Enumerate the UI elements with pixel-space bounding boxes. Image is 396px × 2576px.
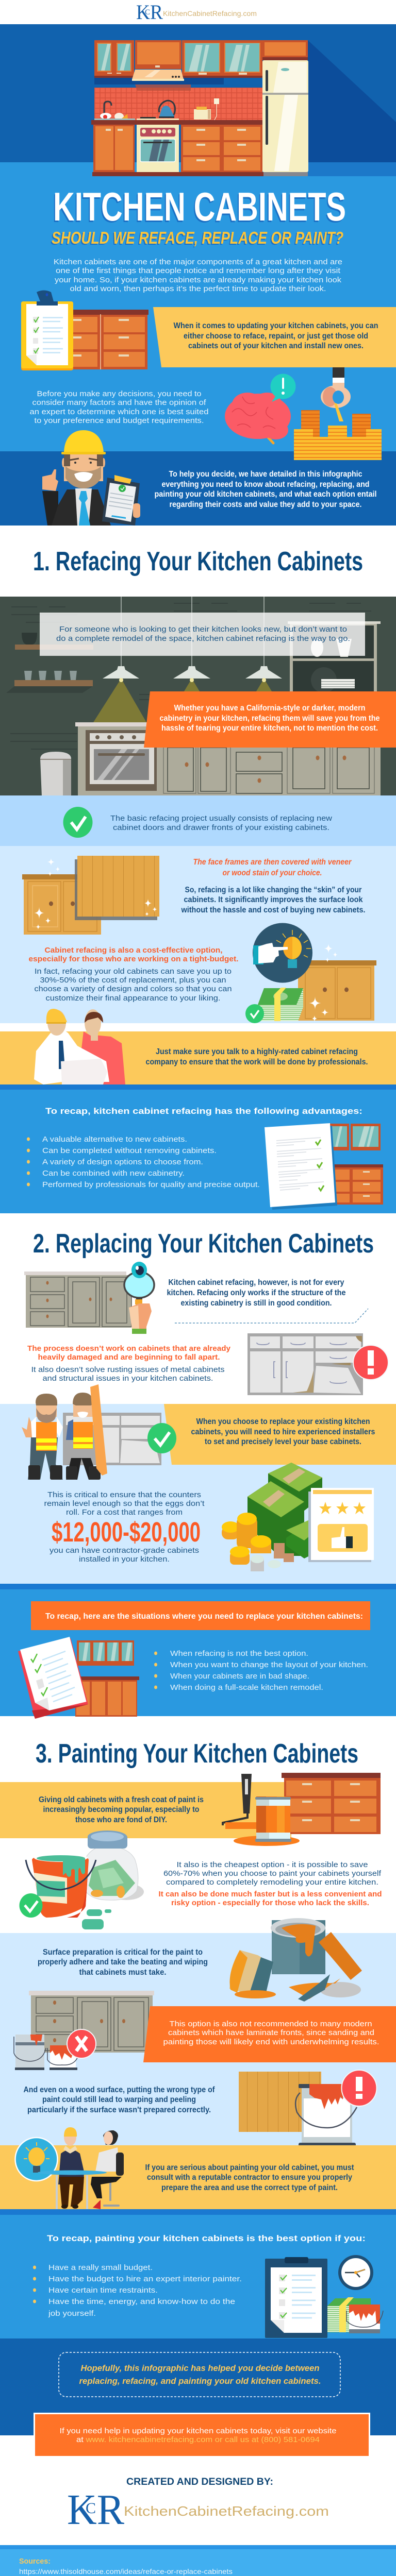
illustration: contractor and client xyxy=(34,1009,125,1084)
text: cheapest option: 60%-70% when you choose to paint your cabinets yourself xyxy=(163,1869,382,1878)
panel: sources: https://www.thisoldhouse.com/ideas/reface-or-replace-cabinets xyxy=(19,2567,233,2575)
callout: yellow update options: either choose to reface, repaint, or just get those old xyxy=(184,332,368,341)
panel: recap refacing advantages: A valuable alternative to new cabinets. xyxy=(42,1135,187,1144)
text: contractor-grade: installed in your kitchen. xyxy=(79,1555,170,1564)
panel: sources xyxy=(0,2545,396,2576)
illustration: paint can, roller and drawers xyxy=(223,1773,381,1846)
illustration: wood panel with paint can alert xyxy=(239,2070,376,2147)
text: before you decide: to your preference and budget requirements. xyxy=(34,416,204,425)
panel: closing dark blue: replacing, refacing, and painting your old kitchen cabinets. xyxy=(79,2376,321,2386)
panel: recap painting: Have a really small budget. xyxy=(48,2263,153,2272)
illustration: brain with alert xyxy=(225,374,296,443)
callout: yellow update options xyxy=(153,307,396,367)
illustration: red clipboard and cabinets xyxy=(18,1637,139,1719)
text: refacing is not for every kitchen xyxy=(167,1278,368,1323)
callout: contact: at www. kitchencabinetrefacing.com or call us at (800) 581-0694 xyxy=(76,2435,320,2444)
panel: yellow talk to a company xyxy=(0,1031,396,1084)
footer logo: KitchenCabinetRefacing.com xyxy=(124,2503,329,2519)
illustration: kitchen scene xyxy=(0,597,396,796)
illustration: kitchen xyxy=(91,40,308,176)
text: how this infographic helps: regarding their costs and value they add to your space. xyxy=(169,500,362,509)
panel: recap replacing: When your cabinets are in bad shape. xyxy=(170,1672,309,1681)
callout: contact xyxy=(34,2413,370,2456)
panel: recap refacing advantages: Performed by professionals for quality and precise output. xyxy=(42,1180,260,1189)
illustration: gray cabinet with paint buckets xyxy=(14,1991,154,2070)
panel: yellow talk to a company: Just make sure you talk to a highly-rated cabinet refacing xyxy=(156,1047,358,1056)
illustration: tipped paint can, brush and roller xyxy=(229,1918,362,2002)
header logo: KitchenCabinetRefacing.com xyxy=(163,9,257,18)
callout: yellow installers: to set and precisely level your base cabinets. xyxy=(205,1437,361,1446)
text: before you decide xyxy=(30,389,209,425)
panel: recap replacing: When you want to change the layout of your kitchen. xyxy=(170,1660,368,1669)
header logo: C xyxy=(145,8,150,16)
cost range figure: $12,000-$20,000 xyxy=(52,1517,201,1548)
band: blue decide panel xyxy=(0,451,396,526)
panel: basic refacing project: cabinet doors and drawer fronts of your existing cabinets. xyxy=(113,823,329,832)
illustration: wood cabinet with veneer xyxy=(22,856,159,935)
text: cheapest option: risky option - especially for those who lack the skills. xyxy=(171,1899,369,1907)
text: before you decide: an expert to determine which one is best suited xyxy=(30,408,209,416)
illustration: gray cabinet with magnifier xyxy=(24,1262,154,1334)
text: face frames xyxy=(181,858,365,914)
callout: yellow installers: cabinets, you will need to hire experienced installers xyxy=(191,1428,375,1436)
text: refacing is not for every kitchen: existing cabinetry is still in good condition. xyxy=(180,1299,332,1308)
panel: recap painting: Have the budget to hire an expert interior painter. xyxy=(48,2275,242,2283)
text: face frames: without the hassle and cost of buying new cabinets. xyxy=(181,906,365,914)
illustration: cabinet, idea and savings xyxy=(245,923,376,1023)
panel: yellow fresh coat: Giving old cabinets with a fresh coat of paint is xyxy=(39,1795,204,1804)
text: how this infographic helps: painting your old kitchen cabinets, and what each option entail xyxy=(155,490,376,499)
intro text: old and worn, then perhaps it’s the perfect time to update their look. xyxy=(70,284,326,293)
panel: yellow talk to a company: company to ensure that the work will be done by professionals. xyxy=(145,1058,368,1066)
panel: yellow reputable contractor: prepare the area and use the correct type of paint. xyxy=(161,2183,338,2192)
illustration: clipboard, clock, money and paint xyxy=(265,2255,383,2338)
panel: yellow reputable contractor xyxy=(0,2145,396,2209)
text: cost-effective option: choose a variety of design and colors so that you can xyxy=(34,985,232,993)
text: damaged cabinets warning: and structural issues in your kitchen cabinets. xyxy=(42,1374,213,1383)
text: contractor-grade xyxy=(50,1546,199,1564)
header logo: KR xyxy=(136,1,163,24)
text: damaged cabinets warning xyxy=(27,1344,231,1383)
intro text: Kitchen cabinets are one of the major components of a great kitchen and are xyxy=(54,258,342,266)
text: cost-effective option: In fact, refacing your old cabinets can save you up to xyxy=(35,967,232,976)
text: critical levels: remain level enough so that the eggs don’t xyxy=(44,1499,205,1508)
illustration: checklist paper and cabinets xyxy=(265,1123,383,1210)
footer logo: KR xyxy=(67,2486,124,2534)
text: before you decide: Before you make any decisions, you need to xyxy=(37,389,201,398)
text: cost-effective option: especially for those who are working on a tight-budget. xyxy=(29,955,238,963)
panel: recap refacing advantages: Can be combined with new cabinetry. xyxy=(42,1169,185,1178)
panel: sources: Sources: xyxy=(19,2557,51,2566)
text: face frames: or wood stain of your choice. xyxy=(223,869,322,877)
text: cost-effective option: 30%-50% of the cost of replacement, plus you can xyxy=(40,976,226,985)
panel: closing dark blue xyxy=(0,2338,396,2435)
illustration: clipboard checklist xyxy=(21,291,73,370)
text: wrong paint warning xyxy=(24,2086,215,2114)
text: how this infographic helps: To help you decide, we have detailed in this infographic xyxy=(169,470,362,479)
panel: yellow fresh coat: those who are fond of DIY. xyxy=(75,1816,167,1824)
callout: yellow installers xyxy=(164,1404,396,1465)
panel: basic refacing project: The basic refacing project usually consists of replacing new xyxy=(110,814,332,823)
panel: recap painting: job yourself. xyxy=(48,2309,96,2318)
text: cheapest option: compared to completely remodeling your entire kitchen. xyxy=(166,1878,378,1887)
panel: closing dark blue: Hopefully, this infographic has helped you decide between xyxy=(80,2363,320,2373)
text: cost-effective option: customize their final appearance to your liking. xyxy=(45,994,221,1003)
text: cost-effective option: Cabinet refacing is also a cost-effective option, xyxy=(44,946,223,955)
text: surface preparation xyxy=(38,1948,208,1977)
illustration: contractor with clipboard xyxy=(42,430,140,526)
text: critical levels xyxy=(44,1490,205,1517)
illustration: savings jar and paint bucket xyxy=(20,1831,144,1929)
callout: orange California-style: Whether you have a California-style or darker, modern xyxy=(174,704,365,713)
panel: yellow reputable contractor: If you are serious about painting your old cabinet, you must xyxy=(145,2163,354,2172)
panel: refacing intro: For someone who is looking to get their kitchen looks new, but don’t want to xyxy=(59,625,347,634)
text: contractor-grade: you can have contractor-grade cabinets xyxy=(50,1546,199,1555)
callout: yellow update options: cabinets out of your kitchen and install new ones. xyxy=(188,342,364,350)
panel: refacing intro xyxy=(40,613,365,656)
intro text xyxy=(54,258,342,293)
illustration: installers and damaged cabinet xyxy=(22,1384,176,1480)
text: before you decide: consider many factors and have the opinion of xyxy=(32,398,206,407)
panel: pale blue refacing details xyxy=(0,846,396,1023)
panel: recap refacing advantages xyxy=(0,1084,396,1213)
hero background xyxy=(0,24,396,451)
text: cheapest option xyxy=(159,1860,382,1907)
credits heading: CREATED AND DESIGNED BY: xyxy=(126,2477,273,2487)
footer logo: C xyxy=(86,2500,96,2517)
illustration: drawers cabinet xyxy=(73,310,148,369)
callout: yellow update options: When it comes to updating your kitchen cabinets, you can xyxy=(173,321,378,330)
text: cost-effective option xyxy=(29,946,238,1003)
text: surface preparation: properly adhere and take the beating and wiping xyxy=(38,1958,208,1967)
text: damaged cabinets warning: It also doesn’t solve rusting issues of metal cabinets xyxy=(31,1365,224,1374)
illustration: money, coins and rating card xyxy=(222,1463,374,1571)
text: refacing is not for every kitchen: kitchen. Refacing only works if the structure of the xyxy=(167,1289,346,1297)
callout: orange laminate warning: painting those will likely end with underwhelming results. xyxy=(163,2038,380,2046)
panel: yellow fresh coat xyxy=(0,1782,291,1838)
panel: recap replacing: When doing a full-scale kitchen remodel. xyxy=(170,1683,323,1692)
callout: orange California-style xyxy=(144,691,396,748)
text: face frames: cabinets. It significantly improves the surface look xyxy=(184,895,363,904)
callout: orange laminate warning: This option is also not recommended to many modern xyxy=(169,2020,372,2028)
text: cheapest option: It also is the cheapest option - it is possible to save xyxy=(176,1860,368,1869)
callout: orange laminate warning xyxy=(143,2006,396,2062)
text: critical levels: This is critical to ensure that the counters xyxy=(47,1490,201,1499)
callout: yellow installers: When you choose to replace your existing kitchen xyxy=(196,1417,370,1426)
callout: contact: If you need help in updating your kitchen cabinets today, visit our website xyxy=(60,2427,336,2435)
panel: recap replacing: To recap, here are the situations where you need to replace your kitchen cabinets: xyxy=(45,1612,363,1621)
panel: recap painting: Have certain time restraints. xyxy=(48,2286,158,2295)
illustration: damaged cabinet with alert xyxy=(248,1333,388,1395)
callout: orange laminate warning: cabinets which have laminate fronts, since sanding and xyxy=(168,2028,374,2037)
panel: pale blue replacing xyxy=(0,1404,396,1584)
footer logo xyxy=(67,2486,329,2534)
panel: recap replacing: When refacing is not the best option. xyxy=(170,1649,308,1658)
illustration: hand and coin stacks xyxy=(294,367,382,460)
panel: recap painting: To recap, painting your kitchen cabinets is the best option if you: xyxy=(47,2233,366,2243)
text: wrong paint warning: paint could still lead to warping and peeling xyxy=(42,2095,196,2104)
text: how this infographic helps: everything you need to know about refacing, replacing, and xyxy=(162,480,369,489)
callout: orange California-style: hassle of tearing your entire kitchen, not to mention the cost. xyxy=(161,724,378,733)
intro text: your home. So, if your kitchen cabinets are already making your kitchen look xyxy=(55,276,342,284)
text: wrong paint warning: And even on a wood surface, putting the wrong type of xyxy=(24,2086,215,2094)
text: wrong paint warning: particularly if the surface wasn't prepared correctly. xyxy=(27,2106,211,2114)
panel: recap refacing advantages: To recap, kitchen cabinet refacing has the following advantages: xyxy=(45,1106,362,1116)
text: cheapest option: It can also be done much faster but is a less convenient and xyxy=(159,1890,382,1899)
text: surface preparation: that cabinets must take. xyxy=(79,1968,166,1977)
panel: recap painting: Have the time, energy, and know-how to do the xyxy=(48,2297,235,2306)
text: face frames: So, refacing is a lot like changing the “skin” of your xyxy=(185,886,362,894)
panel: recap replacing xyxy=(0,1584,396,1716)
text: surface preparation: Surface preparation is critical for the paint to xyxy=(43,1948,203,1957)
panel: recap refacing advantages: Can be completed without removing cabinets. xyxy=(42,1146,217,1155)
panel: pale blue surface preparation xyxy=(0,1933,396,2145)
panel: recap refacing advantages: A variety of design options to choose from. xyxy=(42,1158,203,1166)
text: critical levels: roll. For a cost that ranges from xyxy=(66,1508,183,1517)
text: refacing is not for every kitchen: Kitchen cabinet refacing, however, is not for every xyxy=(168,1278,344,1287)
illustration: consultation at table xyxy=(15,2127,124,2209)
header logo xyxy=(136,1,257,24)
panel: yellow fresh coat: increasingly becoming popular, especially to xyxy=(43,1805,200,1814)
panel: refacing intro: do a complete remodel of the space, kitchen cabinet refacing is the way to go. xyxy=(56,634,350,643)
panel: yellow reputable contractor: consult with a reputable contractor to ensure you properly xyxy=(147,2173,352,2182)
text: how this infographic helps xyxy=(155,470,376,509)
text: face frames: The face frames are then covered with veneer xyxy=(193,858,352,867)
text: damaged cabinets warning: The process doesn’t work on cabinets that are already xyxy=(27,1344,231,1353)
text: damaged cabinets warning: heavily damaged and are beginning to fall apart. xyxy=(38,1353,220,1362)
intro text: one of the first things that people notice and remember long after they visit xyxy=(56,266,341,275)
panel: basic refacing project xyxy=(0,795,396,846)
panel: recap painting xyxy=(0,2209,396,2338)
